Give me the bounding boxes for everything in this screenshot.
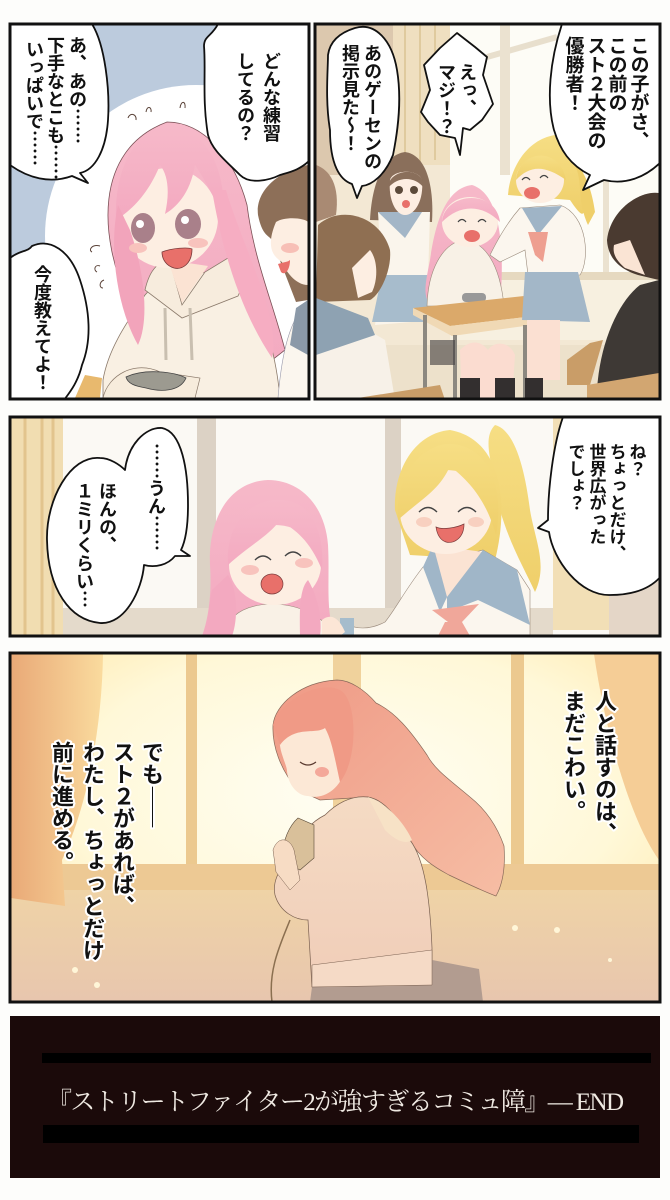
speech bubble: 今度教えてよ: 今度教えてよ！ [30, 264, 56, 391]
speech bubble: うん、ほんの1ミリくらい: ほんの、 [95, 482, 121, 554]
caption: でも、スト2があれば: スト２があれば、 [108, 741, 140, 917]
speech bubble: あ、あの [10, 24, 108, 183]
speech bubble: うん、ほんの1ミリくらい: ……うん…… [144, 443, 170, 551]
caption: でも、スト2があれば: わたし、ちょっとだけ [78, 741, 110, 961]
character: pink-haired girl at desk [425, 185, 504, 306]
speech bubble: あのゲーセン: 掲示見た〜！ [338, 44, 364, 152]
character: dark-haired boy in jacket [567, 193, 659, 400]
speech bubble: うん、ほんの1ミリくらい [47, 428, 190, 623]
speech bubble: ね？ちょっとだけ [538, 417, 662, 595]
caption: でも、スト2があれば [47, 741, 169, 961]
speech bubble: 今度教えてよ [10, 244, 89, 400]
character: brown-haired student in foreground [316, 215, 395, 400]
speech bubble: ね？ちょっとだけ: でしょ？ [564, 443, 590, 511]
background: glowing window, floor and curtains [11, 654, 659, 1002]
caption: でも、スト2があれば: 前に進める。 [47, 741, 79, 873]
character: girl in hoodie, profile, hugging controller [271, 680, 504, 1002]
speech bubble: ね？ちょっとだけ: ね？ [626, 443, 650, 477]
speech bubble: どんな練習 [204, 24, 310, 181]
speech bubble: この子がさ: 優勝者！ [562, 36, 588, 112]
speech bubble: えっ、マジ: えっ、 [455, 63, 481, 117]
speech bubble: あのゲーセン: あのゲーセンの [360, 44, 386, 170]
speech bubble: この子がさ [550, 24, 662, 190]
speech bubble: どんな練習: どんな練習 [259, 52, 285, 142]
speech bubble: この子がさ: この前の [604, 36, 632, 112]
speech bubble: えっ、マジ: マジ！？ [434, 63, 460, 135]
speech bubble: この子がさ: スト２大会の [584, 36, 610, 150]
speech bubble: ね？ちょっとだけ: 世界広がった [586, 443, 610, 545]
caption: でも、スト2があれば: でも―― [137, 741, 169, 829]
speech bubble: あ、あの: いっぱいで…… [22, 40, 48, 166]
panel: girl being asked about practice [10, 24, 347, 400]
panel: girls laughing at the window [10, 417, 662, 636]
panel: sunset silhouette of girl hugging controller [10, 653, 660, 1002]
character: blonde girl in sailor uniform [490, 135, 595, 400]
character: blonde girl with ponytail [322, 425, 541, 636]
speech bubble: ね？ちょっとだけ: ちょっとだけ、 [606, 443, 630, 562]
speech bubble: えっ、マジ [421, 33, 493, 155]
character: pink-haired girl in hoodie [75, 122, 285, 398]
icon: sweat and motion marks [90, 102, 185, 288]
panel: end card [10, 1016, 660, 1178]
speech bubble: あのゲーセン [327, 27, 399, 198]
speech bubble: この子がさ: この子がさ、 [626, 36, 654, 150]
caption: 人と話すのは: まだこわい。 [559, 690, 591, 822]
speech bubble: うん、ほんの1ミリくらい: １ミリくらい… [72, 482, 98, 608]
title: end caption: 『ストリートファイター2が強すぎるコミュ障』― END [47, 1088, 624, 1116]
character: brown-haired standing girl [370, 152, 436, 325]
character: far-left girl [316, 165, 337, 222]
caption: 人と話すのは [563, 689, 619, 832]
background: blue sky with white circle [12, 26, 216, 256]
speech bubble: あ、あの: 下手なとこも…… [43, 36, 69, 180]
character: brown-haired friend [258, 165, 308, 398]
panel: classroom crowd [315, 24, 662, 400]
desk [413, 296, 527, 398]
speech bubble: あ、あの: あ、あの…… [65, 36, 91, 144]
background: classroom window and curtain [316, 25, 659, 400]
background: window and curtains [11, 418, 659, 636]
character: pink-haired girl smiling [202, 480, 338, 636]
caption: 人と話すのは: 人と話すのは、 [590, 690, 622, 844]
speech bubble: どんな練習: してるの？ [233, 52, 259, 142]
